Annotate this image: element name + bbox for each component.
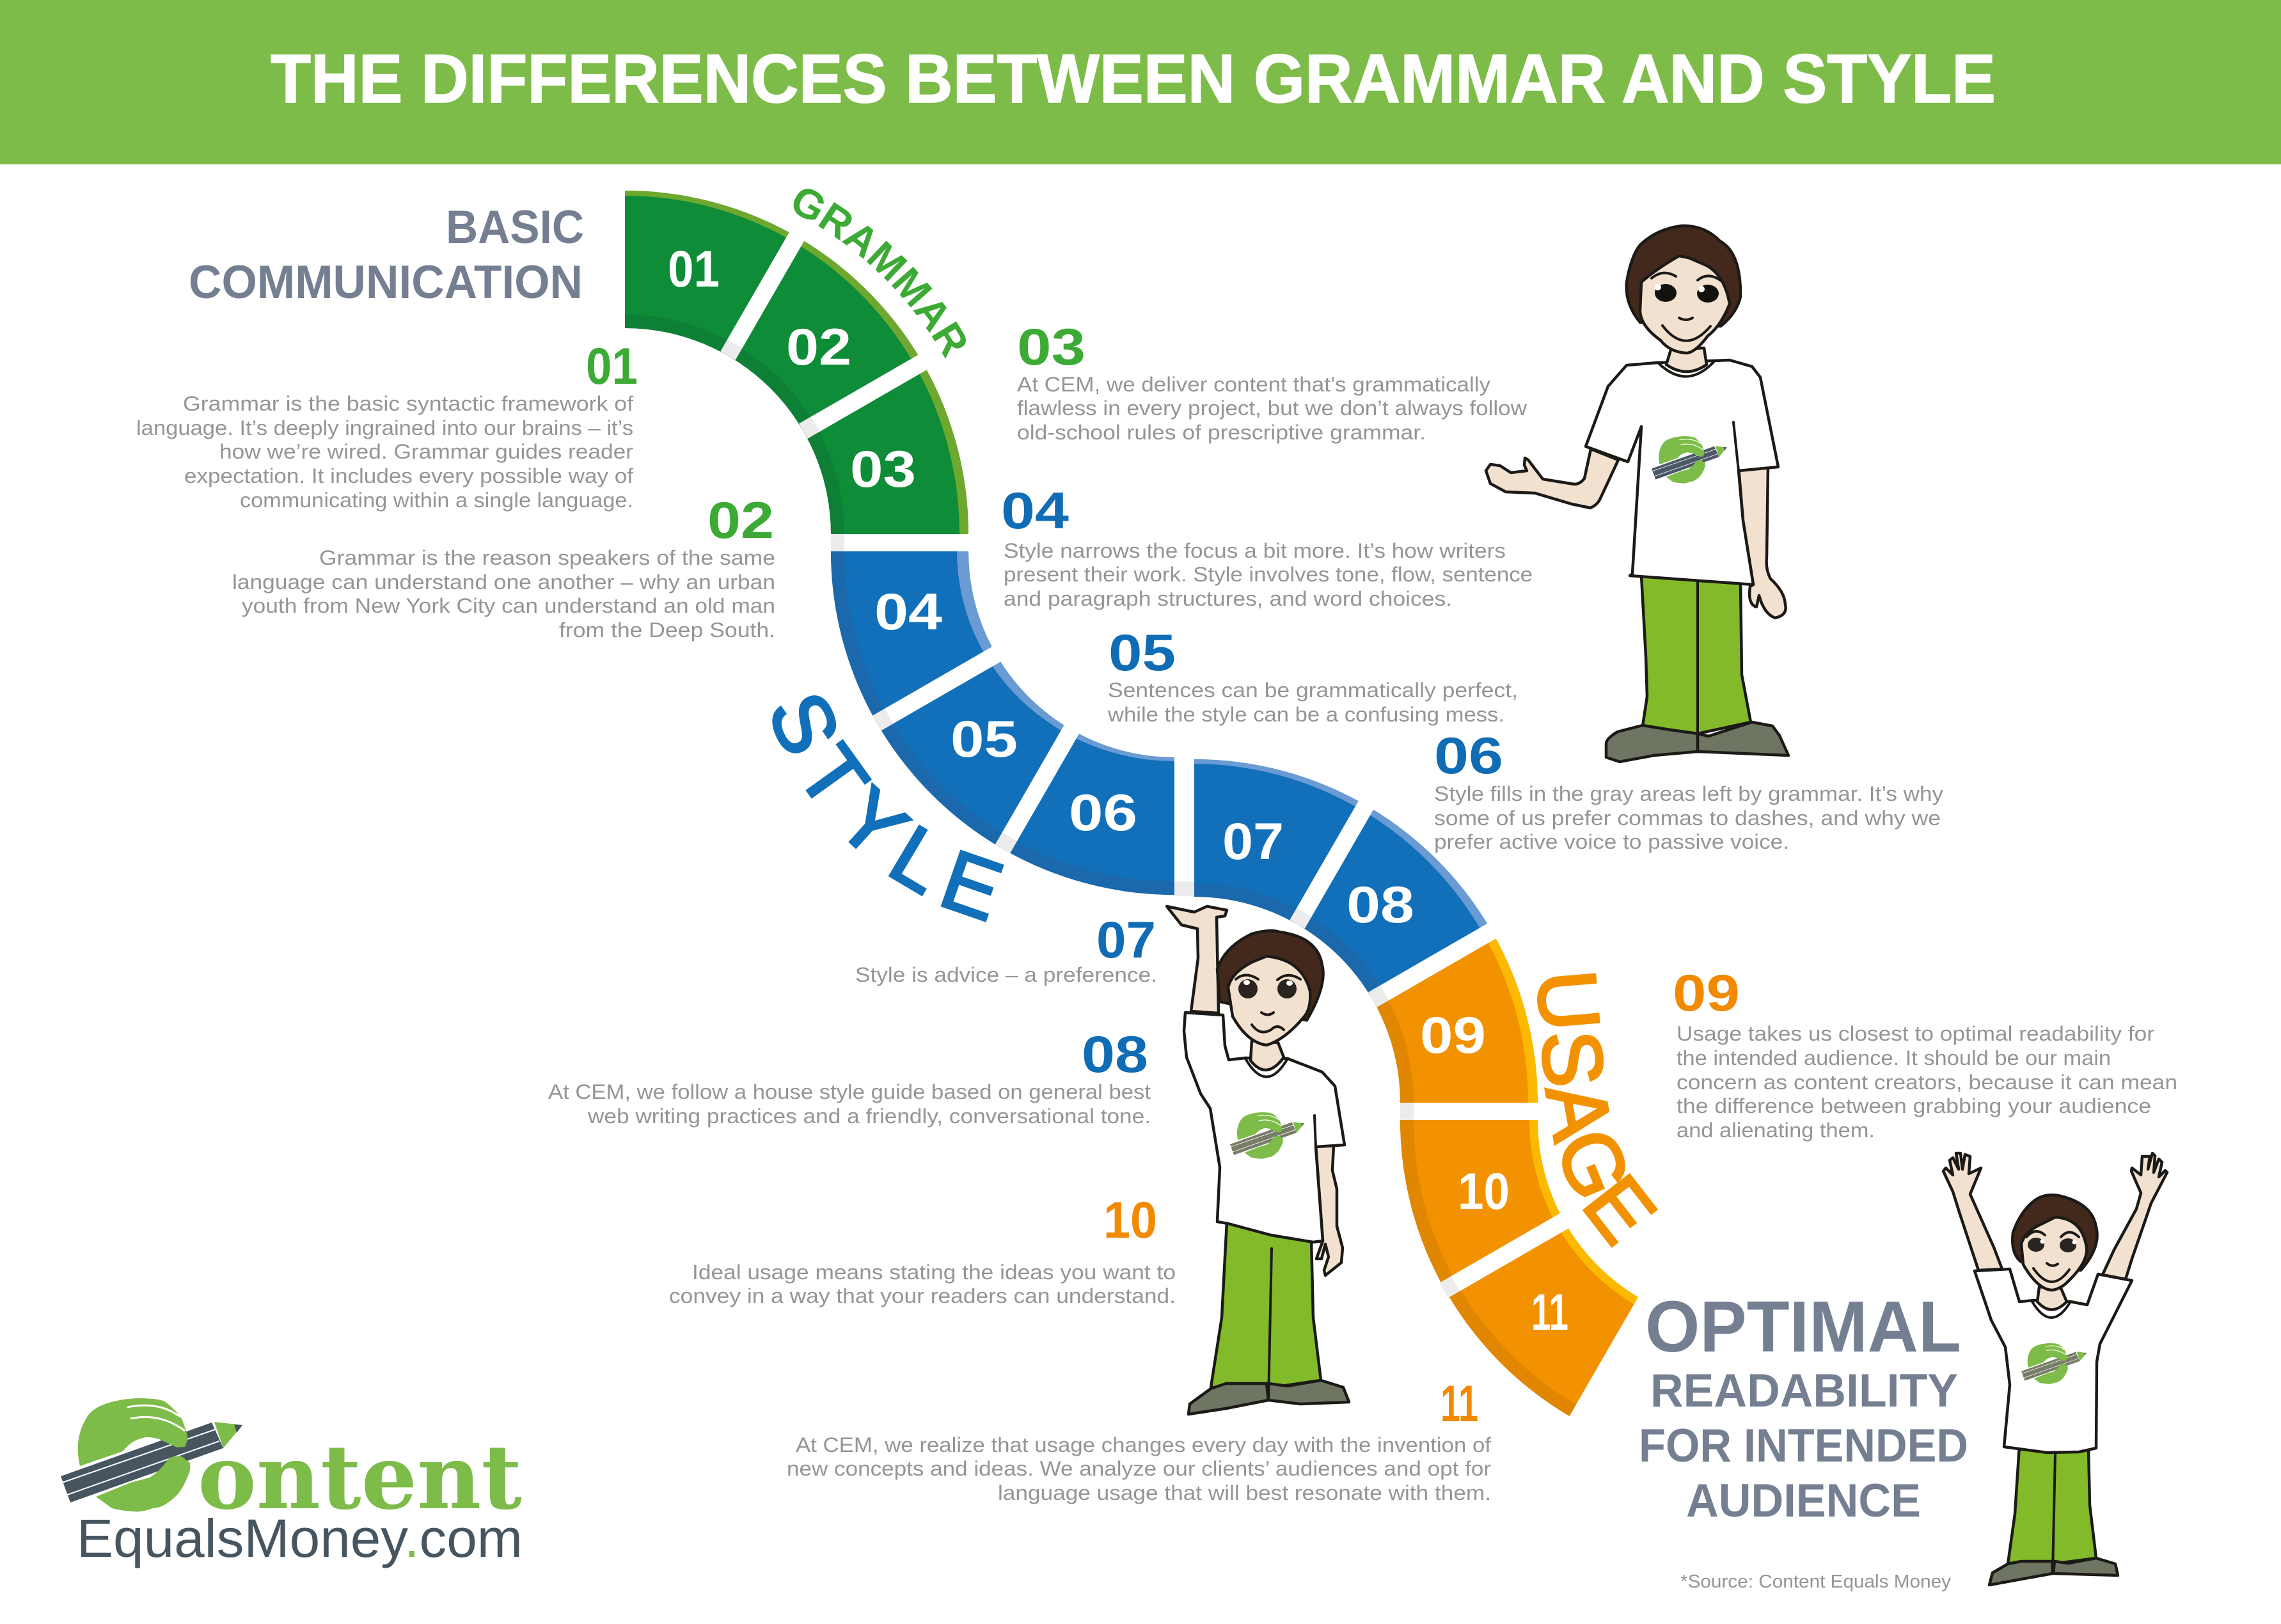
text block 02: 02	[707, 492, 774, 549]
text block 04: 04	[1001, 482, 1069, 540]
curved label: usage: USAGE	[1537, 973, 1658, 1248]
segment number 05: 05	[951, 711, 1018, 768]
text block 01: 01	[586, 338, 638, 395]
heading: basic communication	[189, 201, 584, 308]
text block 04: present their work. Style involves tone, flow, sentence	[1004, 563, 1533, 586]
text block 04: and paragraph structures, and word choices.	[1004, 587, 1452, 610]
text block 10	[669, 1192, 1176, 1307]
text block 01: Grammar is the basic syntactic framework of	[183, 392, 633, 415]
text block 09: 09	[1673, 965, 1740, 1022]
text block 08: web writing practices and a friendly, conversational tone.	[587, 1105, 1151, 1128]
text block 03: old-school rules of prescriptive grammar.	[1017, 421, 1426, 444]
text block 03: 03	[1017, 319, 1085, 376]
heading: optimal readability: OPTIMAL	[1645, 1286, 1961, 1367]
text block 05	[1107, 624, 1518, 726]
text block 05: 05	[1109, 624, 1176, 682]
title: THE DIFFERENCES BETWEEN GRAMMAR AND STYLE	[271, 40, 1996, 117]
heading: basic communication: COMMUNICATION	[189, 256, 583, 308]
segment number 07: 07	[1222, 813, 1284, 871]
heading: optimal readability: READABILITY	[1650, 1365, 1958, 1417]
logo	[61, 1398, 523, 1568]
text block 02: youth from New York City can understand an old man	[242, 594, 775, 617]
text block 10: 10	[1103, 1192, 1157, 1249]
text block 10: convey in a way that your readers can understand.	[669, 1284, 1176, 1307]
heading: basic communication: BASIC	[446, 201, 584, 253]
text block 01: how we’re wired. Grammar guides reader	[219, 440, 633, 463]
text block 10: Ideal usage means stating the ideas you want to	[692, 1261, 1176, 1284]
text block 01: expectation. It includes every possible way of	[184, 464, 633, 487]
text block 01: communicating within a single language.	[240, 489, 633, 512]
text block 04: Style narrows the focus a bit more. It’s how writers	[1004, 539, 1506, 562]
text block 06: 06	[1434, 727, 1503, 785]
segment number 11: 11	[1531, 1284, 1568, 1341]
road panel: usage end arc	[1400, 1120, 1638, 1416]
text block 01	[136, 338, 638, 512]
text block 07: Style is advice – a preference.	[855, 963, 1157, 986]
text block 06: Style fills in the gray areas left by grammar. It’s why	[1434, 782, 1943, 805]
segment number 06: 06	[1069, 784, 1137, 842]
text block 02	[232, 492, 775, 642]
text block 11	[787, 1375, 1491, 1504]
text block 02: language can understand one another – why an urban	[232, 571, 775, 594]
header band	[0, 0, 2281, 164]
character: hand raised figure	[1167, 906, 1349, 1414]
heading: optimal readability: AUDIENCE	[1686, 1475, 1921, 1527]
text block 09: the intended audience. It should be our main	[1677, 1046, 2111, 1069]
curved label: grammar: GRAMMAR	[793, 189, 966, 359]
text block 08	[548, 1026, 1151, 1128]
text block 05: while the style can be a confusing mess.	[1107, 703, 1504, 726]
text block 06	[1434, 727, 1943, 853]
segment number 02: 02	[786, 319, 851, 376]
text block 08: At CEM, we follow a house style guide based on general best	[548, 1080, 1151, 1103]
text block 09: Usage takes us closest to optimal readability for	[1677, 1022, 2154, 1045]
text block 09	[1673, 965, 2177, 1142]
text block 11: language usage that will best resonate with them.	[998, 1481, 1491, 1504]
segment number 03: 03	[850, 441, 916, 498]
text block 06: prefer active voice to passive voice.	[1434, 830, 1789, 853]
segment number 01: 01	[668, 240, 720, 298]
character: presenting figure	[1486, 226, 1788, 762]
segment number 09: 09	[1420, 1007, 1486, 1064]
text block 02: from the Deep South.	[559, 619, 775, 642]
text block 11: At CEM, we realize that usage changes every day with the invention of	[796, 1433, 1491, 1456]
source note: *Source: Content Equals Money	[1680, 1572, 1952, 1592]
logo: ontent	[198, 1424, 522, 1529]
road panel: grammar arc	[625, 191, 968, 551]
text block 08: 08	[1082, 1026, 1148, 1084]
character: celebrating figure	[1943, 1153, 2167, 1585]
text block 03: At CEM, we deliver content that’s grammatically	[1017, 373, 1490, 396]
text block 03	[1017, 319, 1527, 444]
text block 11: new concepts and ideas. We analyze our clients’ audiences and opt for	[787, 1457, 1491, 1480]
text block 05: Sentences can be grammatically perfect,	[1108, 679, 1518, 702]
text block 07: 07	[1096, 911, 1156, 969]
text block 07	[855, 911, 1157, 986]
logo: EqualsMoney.com	[77, 1508, 523, 1568]
segment number 10: 10	[1458, 1163, 1510, 1220]
text block 09: concern as content creators, because it can mean	[1677, 1071, 2177, 1094]
text block 06: some of us prefer commas to dashes, and why we	[1434, 807, 1941, 830]
text block 01: language. It’s deeply ingrained into our brains – it’s	[136, 416, 633, 439]
heading: optimal readability: FOR INTENDED	[1639, 1420, 1968, 1472]
curved label: style: STYLE	[772, 695, 1004, 922]
text block 04	[1001, 482, 1533, 610]
road panel: style arc part one	[831, 551, 1194, 896]
text block 09: and alienating them.	[1677, 1119, 1875, 1142]
text block 09: the difference between grabbing your audience	[1677, 1094, 2151, 1117]
heading: optimal readability	[1639, 1286, 1968, 1527]
text block 03: flawless in every project, but we don’t always follow	[1017, 397, 1527, 420]
text block 11: 11	[1440, 1375, 1478, 1433]
text block 02: Grammar is the reason speakers of the same	[319, 546, 775, 569]
segment number 08: 08	[1346, 876, 1414, 934]
segment number 04: 04	[874, 583, 942, 641]
road panel: style and usage arc	[1194, 759, 1538, 1120]
